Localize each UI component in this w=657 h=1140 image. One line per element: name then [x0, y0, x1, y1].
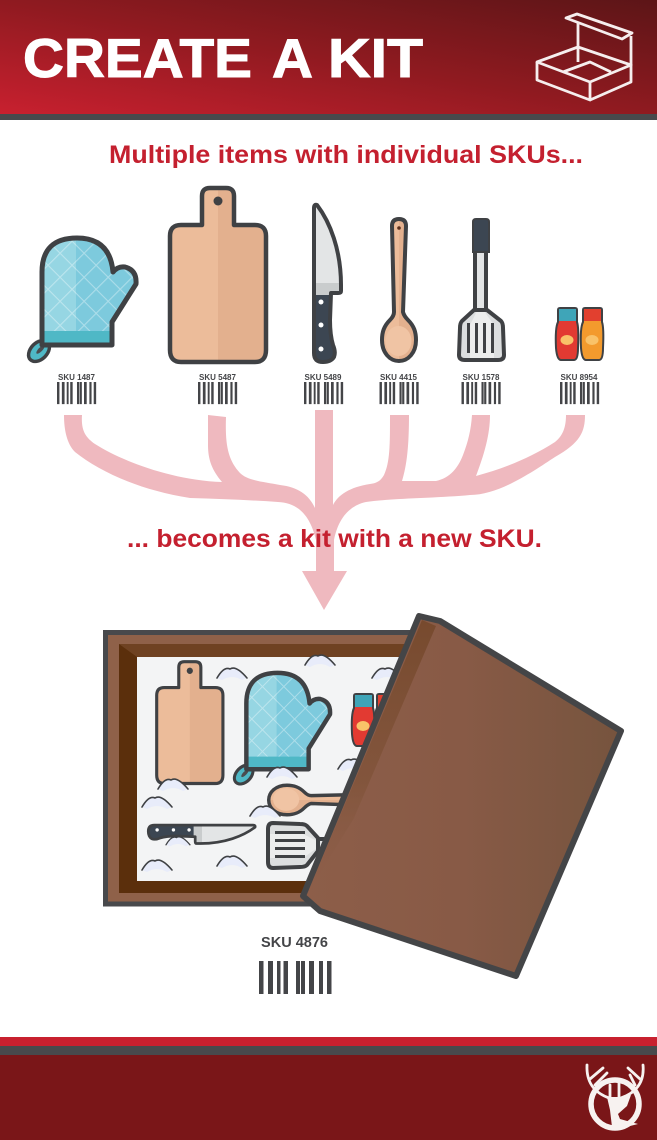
sku label: 5489: SKU 5489 [305, 373, 342, 382]
item: knife [314, 205, 341, 362]
sku label: 5489 [304, 373, 343, 404]
peanuts over items [158, 767, 297, 846]
item: wooden spoon [382, 219, 416, 361]
kit sku label [259, 935, 332, 994]
item: spatula [459, 219, 504, 360]
box lid [303, 616, 621, 976]
heading: becomes a kit: ... becomes a kit with a new SKU. [127, 525, 542, 553]
arrow: items merging into kit [64, 410, 585, 610]
logo: deer in ring [587, 1065, 643, 1128]
title [23, 27, 423, 89]
sku label: 4415: SKU 4415 [380, 373, 418, 382]
packing peanuts [142, 655, 402, 872]
packed spatula [268, 823, 409, 868]
sku label: 1578: SKU 1578 [463, 373, 500, 382]
title: KIT [328, 27, 423, 89]
item: cutting board [170, 188, 266, 362]
icon: open box [537, 14, 632, 100]
sku label: 8954 [560, 373, 599, 404]
footer band [0, 1037, 657, 1140]
packed knife [148, 825, 255, 844]
item: spice bottles [556, 308, 603, 360]
title: A [272, 27, 313, 89]
sku label: 4415 [380, 373, 419, 404]
sku label: 1578 [462, 373, 501, 404]
sku label: 1487 [57, 373, 96, 404]
sku label: 5487: SKU 5487 [199, 373, 236, 382]
title: CREATE [23, 27, 252, 89]
sku label: 1487: SKU 1487 [58, 373, 96, 382]
header banner [0, 0, 657, 120]
kit sku label: SKU 4876 [261, 935, 328, 951]
heading: multiple items: Multiple items with individual SKUs... [109, 141, 583, 169]
item: oven mitt [22, 230, 146, 368]
box interior walls [119, 644, 419, 893]
packed spoon [269, 785, 392, 815]
packing paper [137, 657, 419, 881]
sku label: 5487 [198, 373, 237, 404]
sku label: 8954: SKU 8954 [561, 373, 598, 382]
open kit box [106, 632, 426, 904]
packed cutting board [157, 662, 223, 784]
packed oven mitt [229, 666, 339, 790]
packed spice bottles [352, 694, 397, 746]
